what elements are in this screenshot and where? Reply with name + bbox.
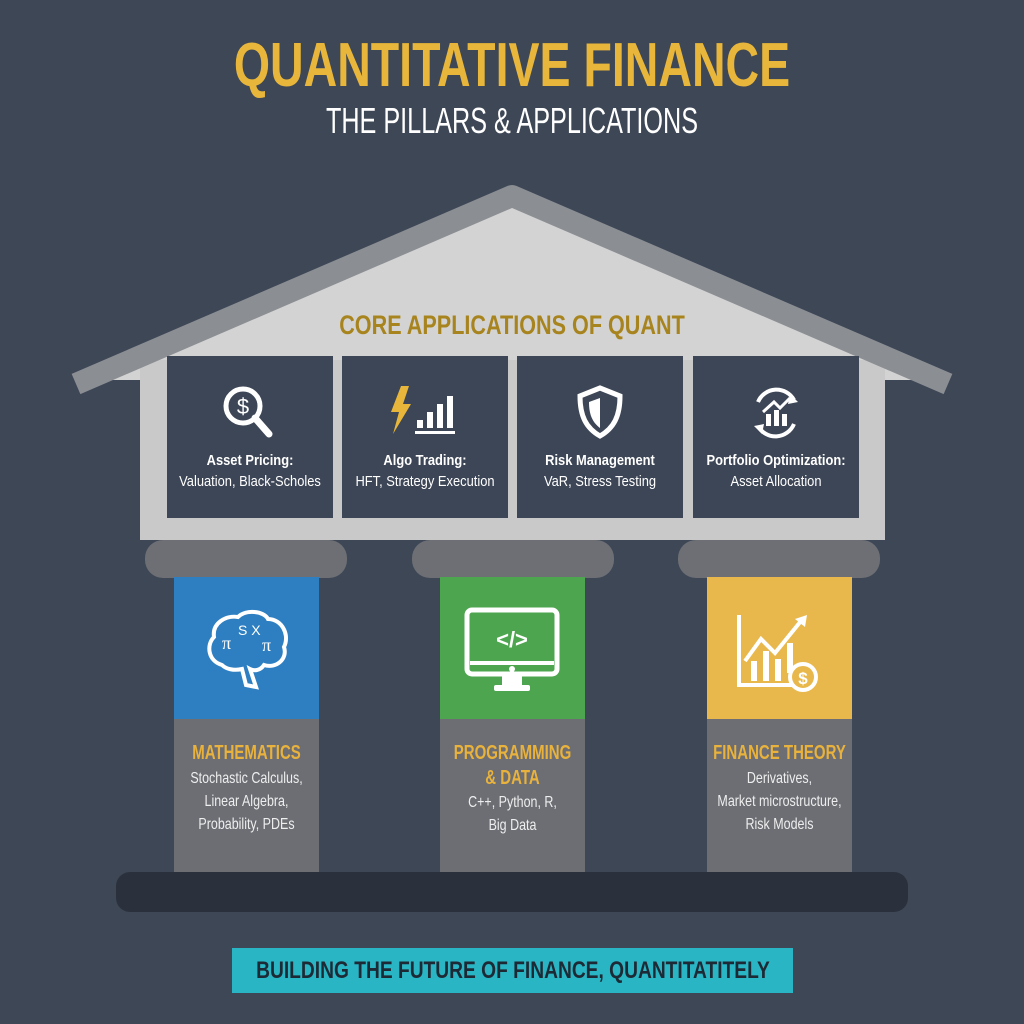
panel: algo trading: HFT, Strategy Execution	[355, 473, 495, 490]
title: QUANTITATIVE FINANCE	[234, 31, 790, 100]
panel: asset pricing: Valuation, Black-Scholes	[179, 473, 321, 490]
icon: magnifier dollar	[224, 386, 272, 438]
pillar: programming	[440, 577, 585, 872]
icon: chart dollar	[737, 615, 818, 692]
icon: magnifier dollar: $	[237, 394, 249, 419]
pillar: finance theory	[707, 577, 852, 872]
panel: risk management: VaR, Stress Testing	[544, 473, 656, 490]
pillar: programming: PROGRAMMING	[454, 742, 571, 764]
pillar: finance theory: FINANCE THEORY	[713, 742, 846, 764]
icon: shield	[578, 385, 622, 439]
icon: chart dollar: $	[798, 669, 808, 688]
roof heading: CORE APPLICATIONS OF QUANT	[339, 310, 685, 340]
icon: brain	[207, 610, 288, 690]
base	[116, 872, 908, 912]
pillar: programming: Big Data	[489, 817, 536, 834]
pillar: mathematics: Probability, PDEs	[198, 816, 295, 833]
pillar: programming: C++, Python, R,	[468, 794, 557, 811]
pillar: finance theory: Derivatives,	[747, 770, 812, 787]
icon: rebalance	[754, 388, 798, 438]
pillar: finance theory: Market microstructure,	[717, 793, 842, 810]
panel: algo trading	[342, 356, 508, 518]
pillar: mathematics: Linear Algebra,	[205, 793, 288, 810]
icon: brain: π	[222, 633, 231, 653]
panel: portfolio optimization: Portfolio Optimization:	[706, 452, 846, 469]
banner	[232, 948, 793, 993]
panel: risk management: Risk Management	[545, 452, 655, 469]
pillar: mathematics: Stochastic Calculus,	[190, 770, 303, 787]
panel: algo trading: Algo Trading:	[383, 452, 467, 469]
pillar: finance theory: Risk Models	[746, 816, 813, 833]
panel: asset pricing: Asset Pricing:	[207, 452, 293, 469]
column capitals	[145, 540, 880, 578]
icon: monitor code	[464, 608, 560, 691]
icon: monitor code: </>	[496, 627, 528, 652]
panel: portfolio optimization: Asset Allocation	[730, 473, 822, 490]
subtitle: THE PILLARS & APPLICATIONS	[326, 100, 698, 141]
icon: bolt chart	[391, 386, 455, 434]
banner: BUILDING THE FUTURE OF FINANCE, QUANTITATITELY	[256, 957, 770, 984]
building roof	[72, 185, 952, 540]
pillar: mathematics	[174, 577, 319, 872]
pillar: mathematics: MATHEMATICS	[192, 742, 301, 764]
panel: risk management	[517, 356, 683, 518]
icon: brain: S X	[238, 622, 261, 638]
panel: asset pricing	[167, 356, 333, 518]
panel: portfolio optimization	[693, 356, 859, 518]
icon: brain: π	[262, 635, 271, 655]
pillar: programming: & DATA	[485, 767, 540, 789]
